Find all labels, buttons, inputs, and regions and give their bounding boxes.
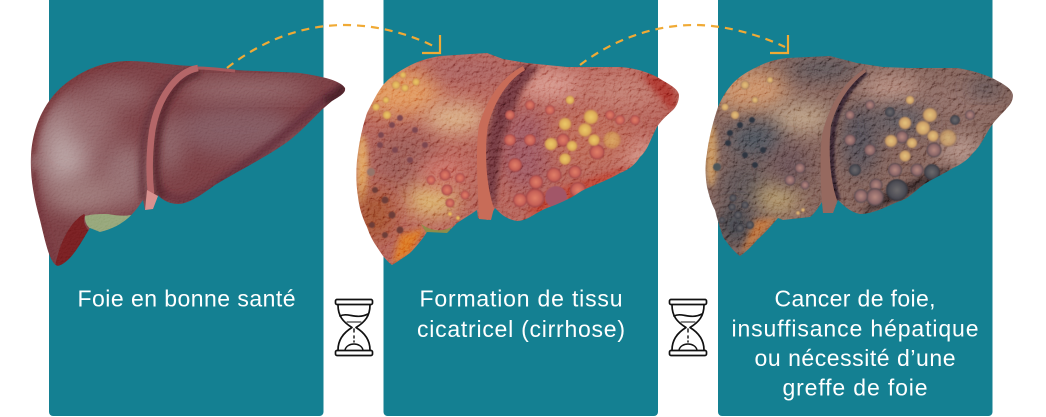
panel: healthy liver <box>49 0 324 416</box>
liver: cancer <box>706 56 1013 256</box>
liver: healthy <box>25 55 350 270</box>
caption: healthy liver: Foie en bonne santé <box>78 286 296 312</box>
caption: cancer, liver failure or transplant: insuffisance hépatique <box>732 316 978 342</box>
icon: hourglass 2 <box>670 300 706 356</box>
nodules <box>713 76 975 232</box>
caption: scar tissue: Formation de tissu <box>420 286 622 312</box>
arrow: healthy liver to cirrhosis <box>227 25 440 68</box>
panel: scar tissue formation <box>384 0 658 416</box>
arrow: cirrhosis to cancer <box>580 25 788 65</box>
panel: liver cancer and failure <box>718 0 992 416</box>
nodules <box>367 72 640 238</box>
caption: cancer, liver failure or transplant: ou nécessité d’une <box>754 345 956 371</box>
caption: scar tissue <box>417 286 625 342</box>
falciform ligament <box>820 69 866 213</box>
gallbladder <box>421 224 452 234</box>
caption: scar tissue: cicatricel (cirrhose) <box>417 316 625 342</box>
icon: hourglass 1 <box>336 300 372 356</box>
liver: cirrhosis <box>350 50 685 270</box>
caption: cancer, liver failure or transplant: Cancer de foie, <box>774 286 936 312</box>
falciform ligament <box>477 66 525 220</box>
falciform ligament <box>145 68 235 210</box>
caption: cancer, liver failure or transplant <box>732 286 978 400</box>
caption: cancer, liver failure or transplant: greffe de foie <box>782 374 928 400</box>
liver underside <box>55 214 90 266</box>
gallbladder <box>85 214 132 232</box>
